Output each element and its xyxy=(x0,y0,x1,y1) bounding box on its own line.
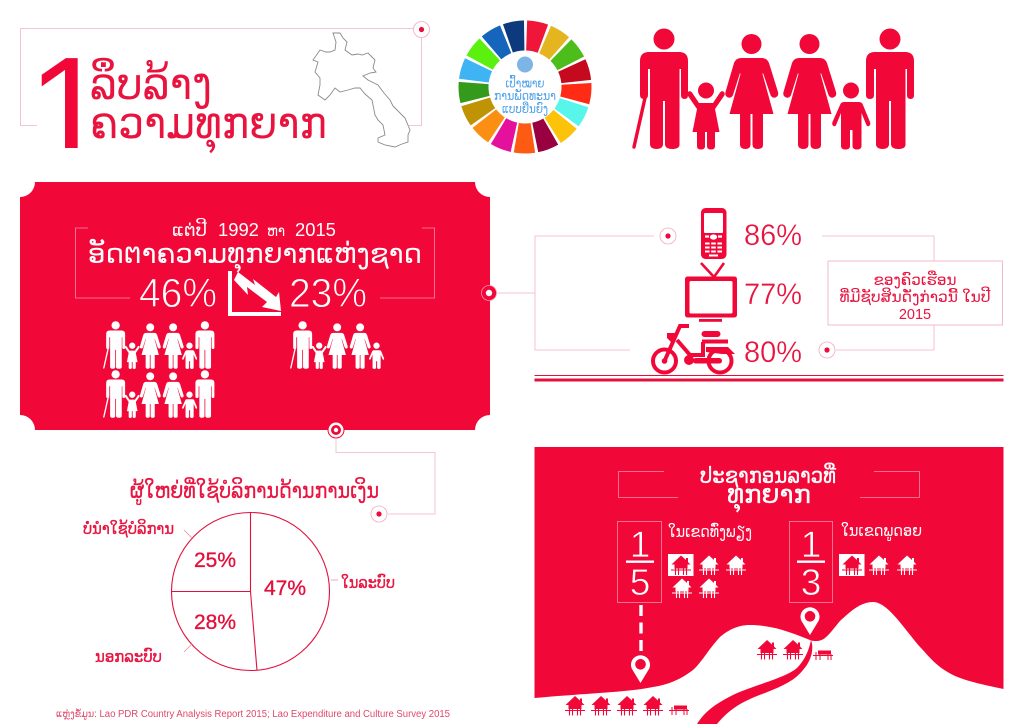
callout: household assets: ທີ່ມີຊັບສິນດັ່ງກ່າວນີ້ ໃນປີ xyxy=(840,285,990,306)
figure: 46 percent: 46% xyxy=(139,270,217,316)
fraction one fifth xyxy=(618,522,662,603)
fraction one third: 1 xyxy=(801,524,821,565)
panel: poor population by area xyxy=(534,447,1004,724)
panel subheading: 1992 xyxy=(218,219,259,240)
fraction one third: 3 xyxy=(801,562,821,603)
icon: family 23 percent xyxy=(291,321,384,369)
fraction one fifth: 5 xyxy=(630,562,650,603)
connector lines: assets xyxy=(497,236,934,350)
SDG wheel label xyxy=(494,74,556,116)
pie value 25 percent: 25% xyxy=(194,549,236,572)
icon: asset target top xyxy=(660,228,676,244)
SDG wheel label: ແບບຍືນຍົງ xyxy=(502,101,548,116)
pie value 28 percent: 28% xyxy=(194,611,236,634)
lowland village xyxy=(565,696,689,716)
icon: television xyxy=(685,263,737,322)
connector marker right xyxy=(482,286,496,300)
heading brackets xyxy=(618,472,920,498)
title text xyxy=(90,57,327,154)
heading: financial services: ຜູ້ໃຫຍ່ທີ່ໃຊ້ບໍລິການດ້ານການເງິນ xyxy=(130,475,379,506)
connector marker bottom xyxy=(328,422,344,438)
figure: phone ownership: 86% xyxy=(744,219,802,252)
pie label formal: ໃນລະບົບ xyxy=(341,573,395,592)
highland village xyxy=(757,640,833,660)
title text: ຄວາມທຸກຍາກ xyxy=(90,99,327,154)
figure: 23 percent: 23% xyxy=(289,270,367,316)
panel: national poverty rate xyxy=(20,182,490,430)
ground lines xyxy=(534,375,1004,382)
SDG wheel label: ເປົ້າໝາຍ xyxy=(506,74,544,90)
pie label unused: ບໍ່ນຳໃຊ້ບໍລິການ xyxy=(83,519,174,538)
title text: ລຶບລ້າງ xyxy=(90,57,212,109)
panel heading: ທຸກຍາກ xyxy=(727,479,811,513)
panel heading: ປະຊາກອນລາວທີ່ xyxy=(700,463,836,488)
figure: motorbike ownership: 80% xyxy=(744,336,802,369)
river xyxy=(697,640,812,724)
icon: families 46 percent row two xyxy=(104,370,214,418)
pie value 47 percent: 47% xyxy=(264,577,306,600)
icon: large family xyxy=(634,28,914,150)
callout: household assets: ຂອງຄົວເຮືອນ xyxy=(874,270,956,289)
lowland houses xyxy=(668,554,746,598)
source note: ແຫຼ່ງຂໍ້ມູນ: Lao PDR Country Analysis Report 2015; Lao Expenditure and Culture Survey 2015 xyxy=(56,708,450,720)
highland houses xyxy=(839,554,917,576)
SDG wheel label: ການພັດທະນາ xyxy=(494,89,556,103)
title number: 1 xyxy=(27,25,110,193)
icon: falling chart xyxy=(228,271,281,316)
pie label informal: ນອກລະບົບ xyxy=(95,647,162,666)
icon: UN emblem xyxy=(517,56,533,72)
icon: mobile phone xyxy=(701,208,726,259)
icon: financial services target xyxy=(371,506,387,522)
pie chart xyxy=(172,512,338,670)
icon: motorbike xyxy=(653,326,735,372)
panel heading: ອັດຕາຄວາມທຸກຍາກແຫ່ງຊາດ xyxy=(88,237,422,274)
panel subheading: 2015 xyxy=(295,219,336,240)
highland label: ໃນເຂດພູດອຍ xyxy=(841,522,922,541)
panel bracket xyxy=(76,228,434,298)
panel subheading: ແຕ່ປີ xyxy=(172,218,207,240)
title frame xyxy=(20,28,422,126)
panel subheading: ຫາ xyxy=(267,223,285,240)
icon: title target marker xyxy=(414,22,430,38)
icon: families 46 percent row one xyxy=(104,321,214,369)
icon: lowland pin xyxy=(631,655,650,683)
dashed line xyxy=(639,605,643,652)
pie ticks xyxy=(184,530,338,652)
figure: television ownership: 77% xyxy=(744,278,802,311)
lowland label: ໃນເຂດທົ່ງພຽງ xyxy=(668,522,752,541)
fraction one third xyxy=(790,522,832,603)
icon: map of Laos xyxy=(313,33,410,147)
fraction one fifth: 1 xyxy=(630,524,650,565)
connector line: financial services xyxy=(336,438,435,514)
panel heading xyxy=(700,463,836,513)
icon: highland pin xyxy=(800,607,820,635)
icon: asset target bottom xyxy=(819,342,835,358)
SDG colour wheel xyxy=(452,14,598,160)
callout: household assets xyxy=(828,261,1002,325)
callout: household assets: 2015 xyxy=(899,307,931,323)
